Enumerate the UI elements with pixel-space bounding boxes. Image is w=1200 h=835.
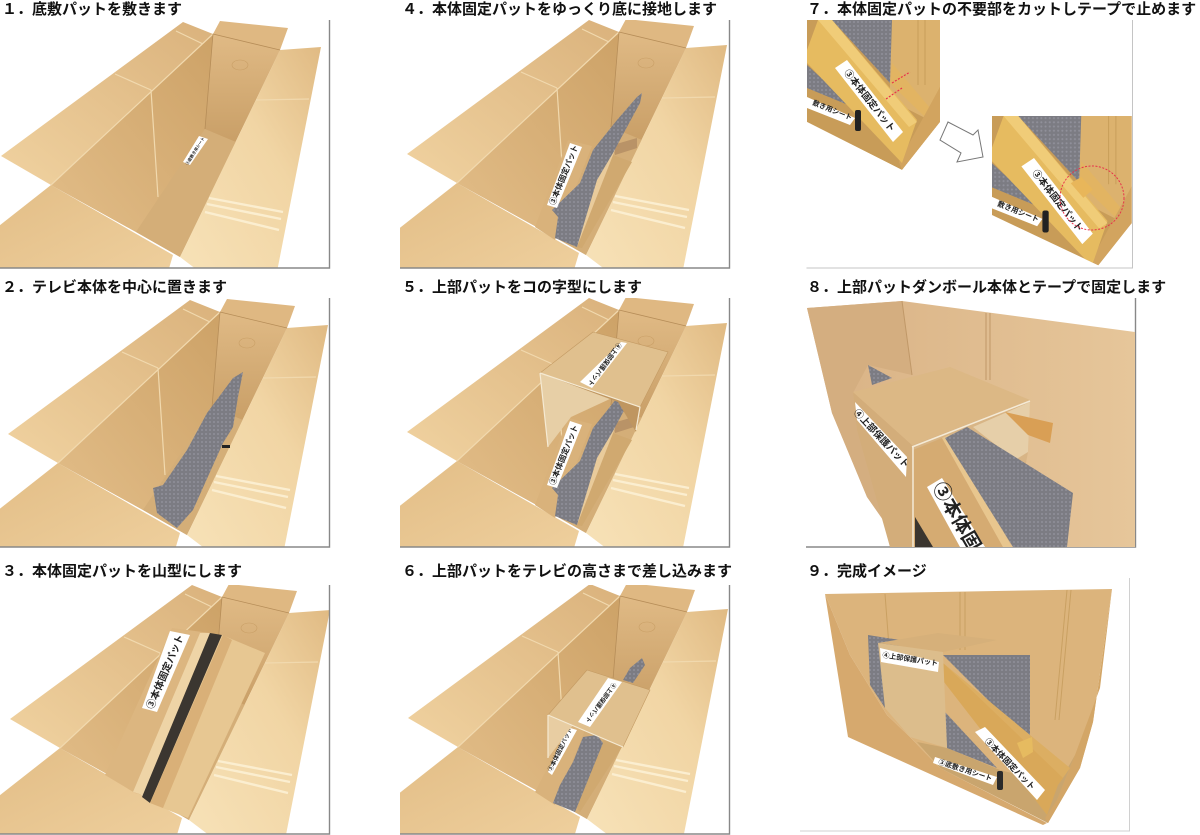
label: main pad: ③本体固定 [928, 478, 994, 572]
panel frame: step 8 [806, 298, 1136, 547]
panel frame: step 7 [806, 20, 1132, 268]
U-shaped top pad: ④上部保護パット [586, 341, 624, 388]
label: main pad: ③本体固定パット [983, 736, 1037, 792]
sheet label: ③底敷き用シート [937, 757, 993, 783]
photo: pad before cutting: ③本体固定パット [841, 67, 898, 134]
box back wall [825, 589, 1112, 823]
arrow: before to after [940, 122, 983, 162]
label: main pad: ③本体固定パット [143, 632, 187, 711]
floor [917, 742, 1075, 823]
panel: step 5 U-shaped top pad [387, 297, 727, 558]
panel frame: step 4 [400, 20, 730, 268]
mountain-shaped pad [105, 628, 265, 818]
photo: completed package [825, 589, 1112, 825]
panel frame: step 5 [400, 298, 730, 547]
front left wedge [825, 594, 1047, 825]
heading: step 7: ７．本体固定パットの不要部をカットしテープで止めます [807, 1, 1196, 18]
heading: step 6: ６．上部パットをテレビの高さまで差し込みます [402, 562, 732, 580]
right wedge [1045, 589, 1112, 823]
U-shaped pad top [926, 367, 1030, 436]
photo: pad after cutting and taping: ③本体固定パット [1030, 167, 1085, 234]
photo: pad before cutting: 敷き用シート [811, 98, 854, 122]
TV wrapped in bubble wrap [153, 372, 243, 528]
panel frame: step 1 [0, 20, 330, 268]
photo: pad after cutting and taping: 敷き用シート [996, 199, 1040, 224]
small bubble corner [868, 365, 892, 385]
label: main pad: ③本体固定パット [547, 423, 580, 486]
interior behind pad [942, 404, 1028, 544]
label: main pad [975, 727, 1045, 800]
U-shaped pad: ④上部保護パット [882, 650, 939, 668]
heading: step 3: ３．本体固定パットを山型にします [2, 563, 242, 580]
heading: step 2: ２．テレビ本体を中心に置きます [2, 278, 227, 296]
heading: step 8: ８．上部パットダンボール本体とテープで固定します [807, 278, 1166, 296]
label: main pad [927, 478, 985, 547]
heading: step 5: ５．上部パットをコの字型にします [402, 278, 642, 296]
panel: step 6 pad inserted to TV height [388, 583, 728, 835]
label: main pad: ③本体固定パット [547, 143, 580, 206]
panel frame: step 6 [400, 585, 730, 834]
photo: pad before cutting [807, 20, 940, 170]
heading: step 4: ４．本体固定パットをゆっくり底に接地します [402, 0, 717, 18]
inner pad [910, 438, 1003, 547]
U-shaped top pad [540, 332, 668, 447]
U-shaped pad [878, 633, 997, 748]
U-shaped pad side [853, 392, 913, 547]
panel frame: step 9 [800, 578, 1130, 831]
U-shaped top pad [548, 670, 650, 758]
bubble wrapped TV [868, 635, 1030, 768]
panel: step 3 mountain pad [0, 584, 330, 835]
callout: red dashed circle [1060, 166, 1124, 230]
photo: top pad taped to box [807, 301, 1135, 572]
heading: step 1: １．底敷パットを敷きます [2, 0, 182, 18]
panel frame: step 3 [0, 585, 330, 834]
U-shaped top pad: ④上部保護パット [583, 681, 618, 724]
panel: step 2 TV in box [0, 299, 328, 560]
heading: step 9: ９．完成イメージ [807, 562, 927, 580]
photo: pad after cutting and taping [992, 116, 1132, 274]
panel frame: step 2 [0, 298, 330, 547]
TV stand [222, 445, 230, 448]
tape [1005, 412, 1053, 443]
lower pads and TV: ③本体固定パット [546, 726, 574, 773]
label: top pad: ④上部保護パット [851, 407, 912, 471]
TV in bubble wrap [945, 427, 1073, 547]
panel: step 1 box with bottom pad [0, 21, 321, 282]
lower pads and TV [535, 658, 645, 812]
panel: step 4 lower pad with TV [387, 19, 727, 280]
main pad [943, 663, 1070, 815]
TV stand [997, 771, 1003, 790]
label: bottom sheet: ③底敷き用シート [184, 136, 206, 166]
